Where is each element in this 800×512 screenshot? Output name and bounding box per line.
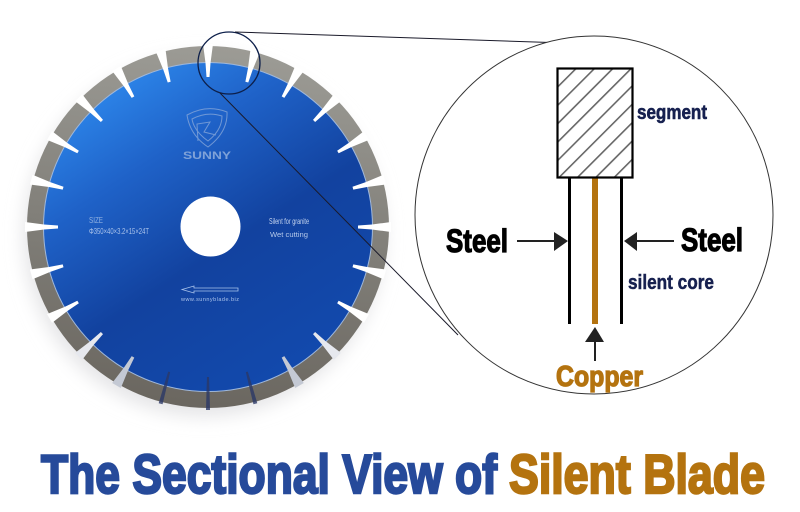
blade shadow — [24, 56, 384, 416]
icon: SUNNY shield logo — [187, 109, 227, 147]
blade centre hole — [180, 196, 240, 256]
blade steel body — [44, 63, 372, 391]
blade rim highlight — [43, 62, 373, 392]
rotation arrow — [182, 286, 238, 293]
title part: blue: The Sectional View of — [41, 443, 498, 505]
title — [41, 443, 765, 505]
left steel label: Steel — [446, 223, 508, 259]
steel plate right — [620, 178, 623, 324]
wet cutting label: Wet cutting — [270, 232, 308, 239]
arrow: left steel — [517, 232, 568, 251]
steel plate left — [568, 178, 571, 324]
copper label: Copper — [556, 361, 643, 393]
blade slots — [25, 44, 391, 410]
blade segment ring — [27, 46, 389, 408]
segment label: segment — [637, 102, 707, 124]
segment block — [558, 68, 632, 178]
right steel label: Steel — [681, 222, 743, 258]
magnifier circle on blade — [198, 32, 260, 94]
silent core label: silent core — [628, 272, 714, 294]
website label: www.sunnyblade.biz — [180, 297, 239, 303]
logo wordmark: SUNNY — [183, 150, 232, 162]
copper core — [592, 178, 598, 324]
arrow: right steel — [624, 232, 674, 251]
arrow: copper — [585, 327, 604, 361]
panel: sectional view circle — [415, 36, 773, 394]
size label: SIZE — [89, 216, 103, 225]
size specification: Φ350×40×3.2×15×24T — [89, 227, 149, 236]
usage label: Silent for granite — [269, 217, 309, 226]
callout lines — [220, 32, 596, 335]
blade — [25, 44, 391, 410]
